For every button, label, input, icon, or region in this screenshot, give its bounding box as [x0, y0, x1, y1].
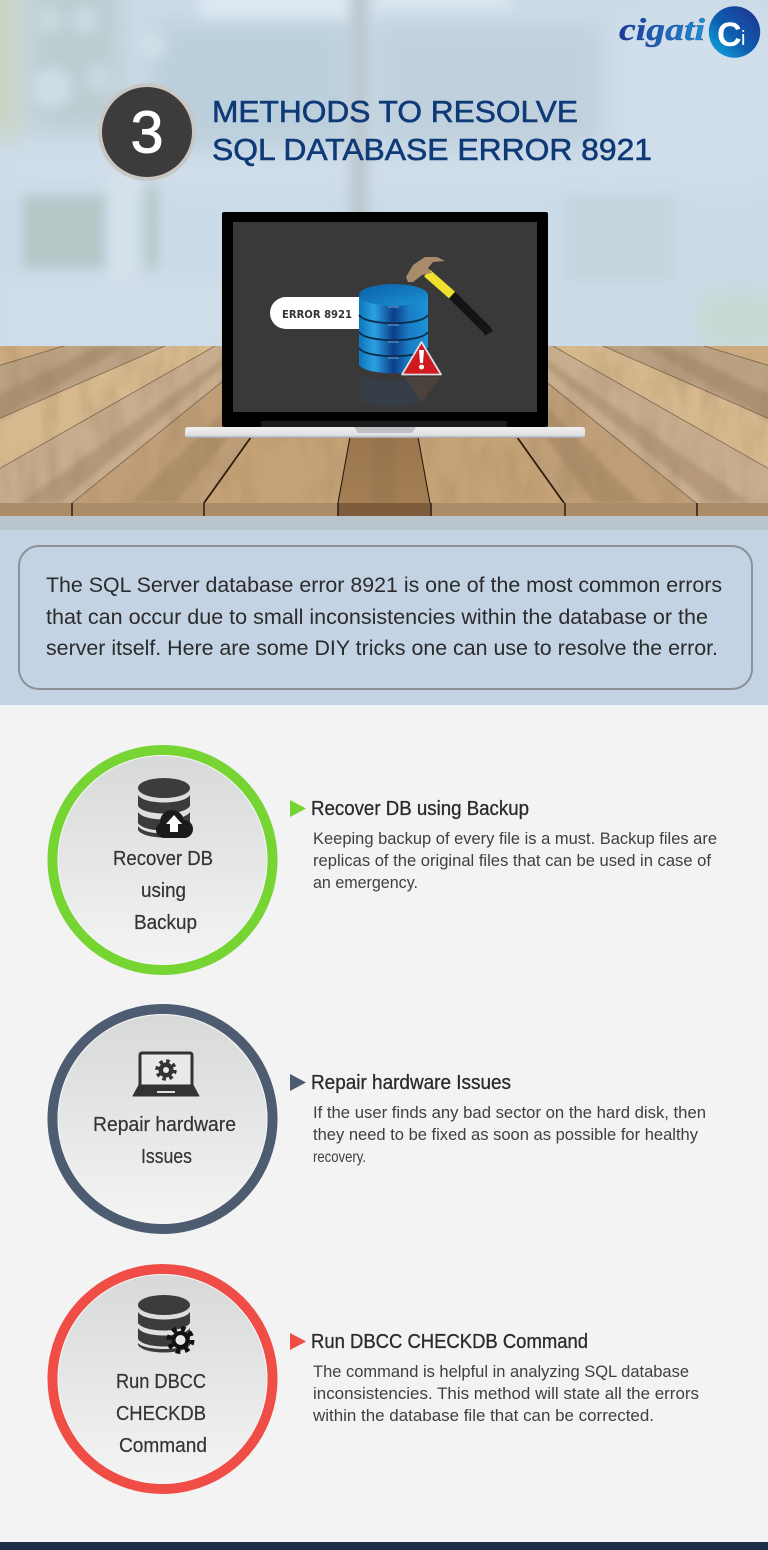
logo: cigati: i [741, 28, 745, 50]
method 3 [52, 1269, 699, 1489]
description: an emergency. [313, 873, 418, 892]
hammer [406, 257, 493, 336]
method 1 [52, 750, 717, 970]
warning triangle [402, 342, 441, 374]
blue database cylinder [359, 284, 428, 373]
circle label: CHECKDB [116, 1403, 206, 1425]
circle label: using [141, 880, 186, 902]
description: inconsistencies. This method will state all the errors [313, 1384, 699, 1403]
blurred window background [0, 0, 768, 360]
description: replicas of the original files that can be used in case of [313, 851, 711, 870]
circle label [116, 1371, 207, 1457]
laptop screen [233, 222, 537, 412]
footer bar [0, 1542, 768, 1550]
laptop base [185, 427, 585, 438]
title: METHODS TO RESOLVE [212, 94, 578, 129]
icon: laptop with gear [133, 1053, 199, 1096]
logo: cigati: cigati [619, 11, 705, 47]
number badge: 3 [98, 83, 196, 181]
arrow [290, 1074, 306, 1091]
intro text: The SQL Server database error 8921 is one of the most common errors [46, 573, 722, 597]
description: they need to be fixed as soon as possible for healthy [313, 1125, 698, 1144]
description: within the database file that can be corrected. [312, 1406, 654, 1425]
circle badge: recover [52, 750, 272, 970]
circle badge: dbcc [52, 1269, 272, 1489]
number badge: 3: 3 [131, 100, 163, 166]
description: Keeping backup of every file is a must. Backup files are [313, 829, 717, 848]
intro band [0, 530, 768, 705]
description [313, 1103, 706, 1166]
description: The command is helpful in analyzing SQL database [313, 1362, 689, 1381]
database reflection [360, 375, 441, 406]
description [313, 829, 717, 892]
laptop illustration [185, 212, 585, 438]
logo: cigati: C [717, 16, 742, 54]
table shadow strip [0, 516, 768, 530]
title [212, 94, 652, 167]
icon: database with gear [138, 1295, 192, 1352]
intro text: that can occur due to small inconsistencies within the database or the [46, 605, 708, 629]
logo: cigati [619, 6, 760, 58]
circle label: Command [119, 1435, 207, 1457]
circle label: Backup [134, 912, 197, 934]
heading: Recover DB using Backup [311, 798, 529, 820]
error pill [270, 297, 360, 329]
circle label: Issues [141, 1146, 192, 1168]
error pill: ERROR 8921 [282, 309, 352, 321]
title: SQL DATABASE ERROR 8921 [212, 132, 652, 167]
laptop bezel [222, 212, 548, 427]
description: If the user finds any bad sector on the hard disk, then [313, 1103, 706, 1122]
arrow [290, 1333, 306, 1350]
circle badge: repair [52, 1009, 272, 1229]
wood table [0, 346, 768, 516]
description [312, 1362, 699, 1425]
table front edge [0, 503, 768, 516]
circle label: Repair hardware [93, 1114, 236, 1136]
intro panel outline [19, 546, 752, 689]
description: recovery. [313, 1149, 366, 1166]
method 2 [52, 1009, 706, 1229]
intro text: server itself. Here are some DIY tricks one can use to resolve the error. [46, 636, 718, 660]
arrow [290, 800, 306, 817]
intro text [46, 573, 722, 660]
circle label [113, 848, 213, 934]
icon: database with cloud [138, 778, 193, 838]
circle label [93, 1114, 236, 1168]
circle label: Recover DB [113, 848, 213, 870]
heading: Repair hardware Issues [311, 1072, 511, 1094]
circle label: Run DBCC [116, 1371, 206, 1393]
heading: Run DBCC CHECKDB Command [311, 1331, 588, 1353]
